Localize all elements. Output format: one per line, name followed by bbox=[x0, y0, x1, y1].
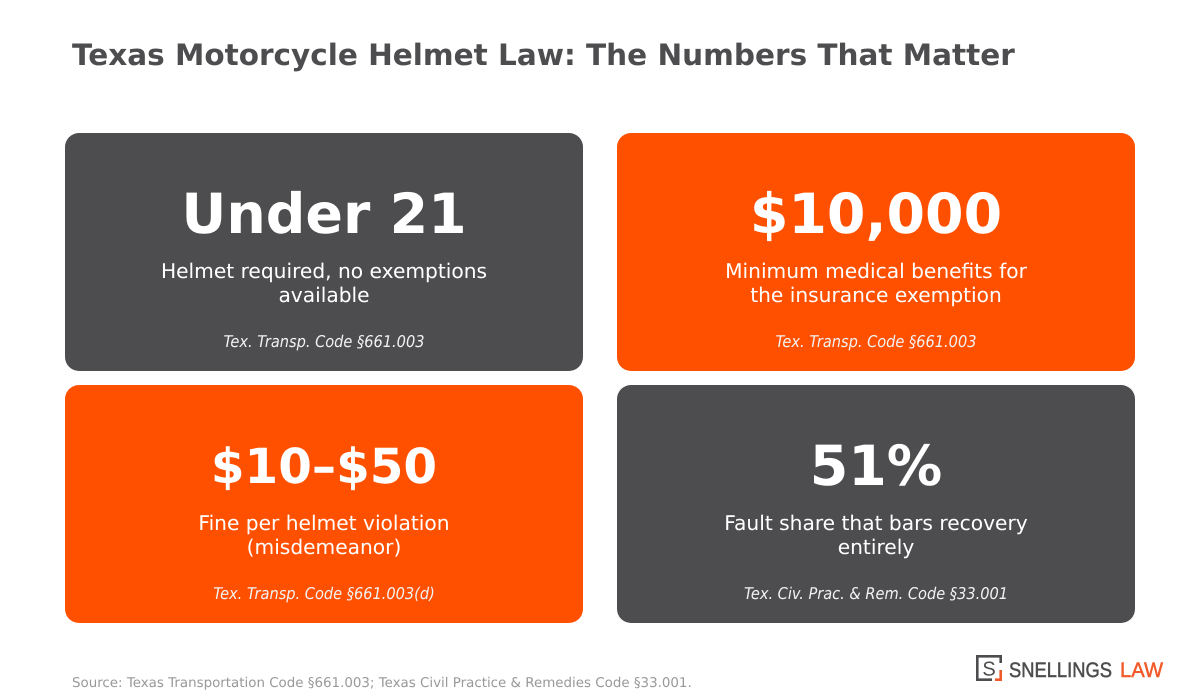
stat: 51%: 51% bbox=[810, 435, 942, 499]
description: Fine per helmet violation bbox=[198, 510, 450, 534]
icon: logo square: S bbox=[982, 658, 996, 680]
panel: under 21 bbox=[65, 133, 583, 371]
panel: 10,000 bbox=[617, 133, 1135, 371]
citation: Tex. Transp. Code §661.003 bbox=[224, 332, 424, 350]
icon: logo square bbox=[977, 656, 1001, 680]
description: Minimum medical benefits for bbox=[725, 258, 1027, 282]
citation: Tex. Civ. Prac. & Rem. Code §33.001 bbox=[744, 584, 1008, 602]
description bbox=[198, 510, 450, 558]
citation: Tex. Transp. Code §661.003(d) bbox=[213, 584, 435, 602]
logo bbox=[976, 655, 1164, 682]
title: Texas Motorcycle Helmet Law: The Numbers That Matter bbox=[72, 38, 1015, 72]
description: available bbox=[278, 282, 370, 306]
description: entirely bbox=[838, 534, 914, 558]
panel: 51% bbox=[617, 385, 1135, 623]
logo wordmark: SNELLINGS bbox=[1009, 659, 1112, 682]
panel: fine bbox=[65, 385, 583, 623]
description: Helmet required, no exemptions bbox=[161, 258, 487, 282]
stat: under 21: Under 21 bbox=[181, 183, 467, 247]
citation: Tex. Transp. Code §661.003 bbox=[776, 332, 976, 350]
description bbox=[724, 510, 1028, 558]
description: the insurance exemption bbox=[750, 282, 1002, 306]
description: (misdemeanor) bbox=[247, 534, 401, 558]
logo wordmark: LAW bbox=[1120, 659, 1163, 682]
description: Fault share that bars recovery bbox=[724, 510, 1028, 534]
description bbox=[725, 258, 1027, 306]
stat: $10,000: $10,000 bbox=[750, 183, 1002, 247]
stat: $10–$50: $10–$50 bbox=[211, 439, 437, 495]
source note: Source: Texas Transportation Code §661.003; Texas Civil Practice & Remedies Code §33.001. bbox=[72, 676, 692, 690]
description bbox=[161, 258, 487, 306]
